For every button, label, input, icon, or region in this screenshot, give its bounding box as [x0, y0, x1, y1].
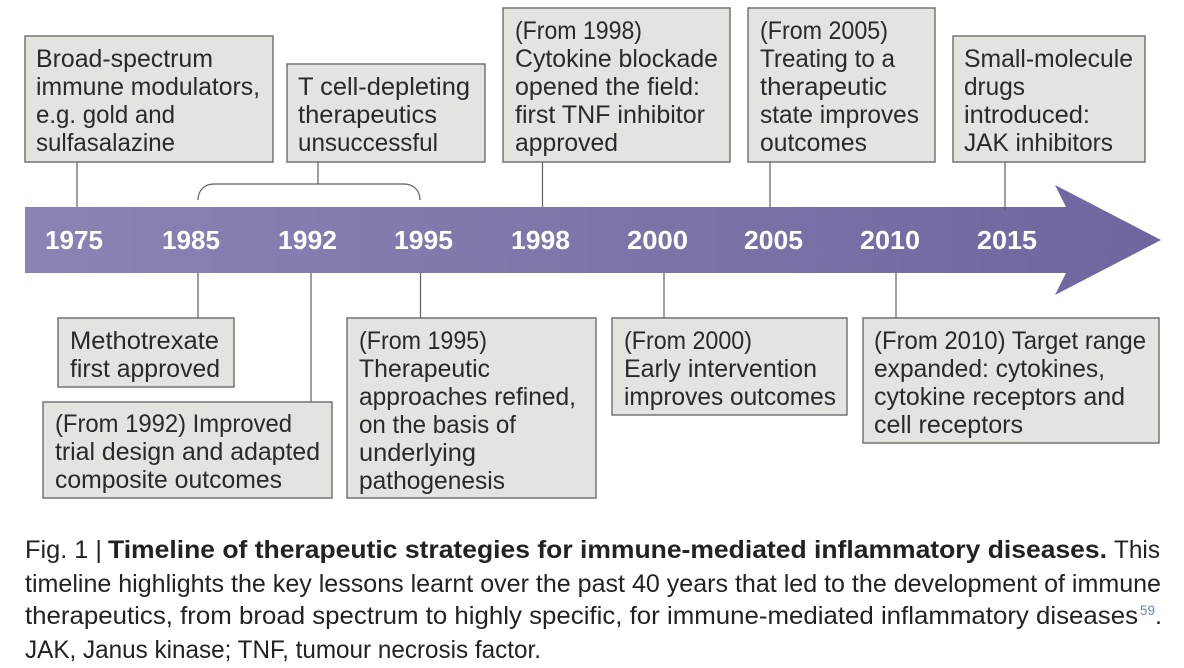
panel: treating to a therapeutic state: (From 2005): [760, 17, 888, 45]
year labels: 2005: [744, 225, 803, 255]
panel: therapeutic approaches refined: (From 1995): [359, 327, 487, 355]
connector: 1985: [197, 273, 199, 318]
year labels: 1985: [162, 225, 220, 255]
bracket: 1985 to 1995: [198, 162, 420, 200]
figure caption: This: [1114, 536, 1160, 564]
panel: cytokine blockade: approved: [515, 129, 618, 157]
connector: 1975: [76, 162, 78, 207]
panel: broad-spectrum immune modulators: sulfasalazine: [36, 129, 175, 157]
panel: therapeutic approaches refined: [347, 318, 596, 498]
panel: methotrexate: Methotrexate: [70, 327, 219, 355]
connector: 2015: [1004, 162, 1006, 210]
panel: cytokine blockade: opened the field:: [515, 73, 700, 101]
panel: small-molecule drugs: [953, 36, 1145, 162]
year labels: 1995: [394, 225, 453, 255]
panel: T cell-depleting therapeutics: therapeutics: [298, 101, 437, 129]
panel: methotrexate: [58, 318, 234, 387]
panel: early intervention: Early intervention: [624, 355, 817, 383]
panel: small-molecule drugs: Small-molecule: [964, 45, 1133, 73]
panel: cytokine blockade: [503, 8, 730, 162]
year labels: 1975: [45, 225, 103, 255]
panel: treating to a therapeutic state: Treating to a: [760, 45, 895, 73]
figure caption: JAK, Janus kinase; TNF, tumour necrosis factor.: [25, 636, 541, 664]
connector: 2000: [663, 273, 665, 318]
panel: therapeutic approaches refined: on the basis of: [359, 411, 516, 439]
panel: improved trial design: trial design and adapted: [55, 438, 320, 466]
year labels: [45, 225, 1037, 255]
panel: target range expanded: expanded: cytokines,: [874, 355, 1105, 383]
figure caption: 59: [1140, 602, 1155, 618]
year labels: 1992: [278, 225, 337, 255]
panel: target range expanded: [863, 318, 1159, 443]
panel: improved trial design: [43, 402, 332, 498]
panel: early intervention: (From 2000): [624, 327, 752, 355]
panel: small-molecule drugs: JAK inhibitors: [964, 129, 1113, 157]
year labels: 2015: [977, 225, 1037, 255]
panel: T cell-depleting therapeutics: unsuccessful: [298, 129, 438, 157]
panel: small-molecule drugs: drugs: [964, 73, 1025, 101]
figure caption: Timeline of therapeutic strategies for immune-mediated inflammatory diseases.: [108, 536, 1107, 564]
panel: cytokine blockade: first TNF inhibitor: [515, 101, 705, 129]
panel: methotrexate: first approved: [70, 355, 220, 383]
connector: 1992: [310, 273, 312, 402]
panel: target range expanded: cell receptors: [874, 411, 1023, 439]
panel: broad-spectrum immune modulators: e.g. gold and: [36, 101, 175, 129]
panel: broad-spectrum immune modulators: immune modulators,: [36, 73, 260, 101]
panel: T cell-depleting therapeutics: [287, 64, 485, 162]
panel: treating to a therapeutic state: outcomes: [760, 129, 867, 157]
panel: small-molecule drugs: introduced:: [964, 101, 1090, 129]
connector: 2010: [895, 273, 897, 318]
panel: early intervention: improves outcomes: [624, 383, 836, 411]
panel: early intervention: [612, 318, 847, 415]
connector: 2005: [769, 162, 771, 207]
figure caption: timeline highlights the key lessons learnt over the past 40 years that led to the development of immune: [25, 570, 1161, 598]
year labels: 2000: [627, 225, 688, 255]
connector: 1995: [420, 273, 422, 318]
figure caption: therapeutics, from broad spectrum to highly specific, for immune-mediated inflammatory diseases: [25, 602, 1138, 630]
panel: treating to a therapeutic state: [748, 8, 935, 162]
panel: therapeutic approaches refined: Therapeutic: [359, 355, 490, 383]
panel: therapeutic approaches refined: approaches refined,: [359, 383, 576, 411]
connector: 1998: [542, 162, 544, 207]
panel: T cell-depleting therapeutics: T cell-depleting: [298, 73, 470, 101]
panel: broad-spectrum immune modulators: [25, 36, 273, 162]
figure caption: [25, 536, 1162, 664]
figure caption: .: [1155, 602, 1162, 630]
panel: improved trial design: composite outcomes: [55, 466, 282, 494]
year labels: 2010: [860, 225, 920, 255]
panel: therapeutic approaches refined: pathogenesis: [359, 467, 505, 495]
panel: target range expanded: (From 2010) Target range: [874, 327, 1146, 355]
panel: cytokine blockade: Cytokine blockade: [515, 45, 718, 73]
timeline arrow: [25, 185, 1161, 295]
panel: therapeutic approaches refined: underlying: [359, 439, 476, 467]
panel: cytokine blockade: (From 1998): [515, 17, 642, 45]
panel: target range expanded: cytokine receptors and: [874, 383, 1125, 411]
panel: treating to a therapeutic state: state improves: [760, 101, 919, 129]
figure caption: Fig. 1 |: [25, 536, 102, 564]
panel: improved trial design: (From 1992) Improved: [55, 410, 292, 438]
year labels: 1998: [511, 225, 570, 255]
panel: treating to a therapeutic state: therapeutic: [760, 73, 887, 101]
panel: broad-spectrum immune modulators: Broad-spectrum: [36, 45, 213, 73]
